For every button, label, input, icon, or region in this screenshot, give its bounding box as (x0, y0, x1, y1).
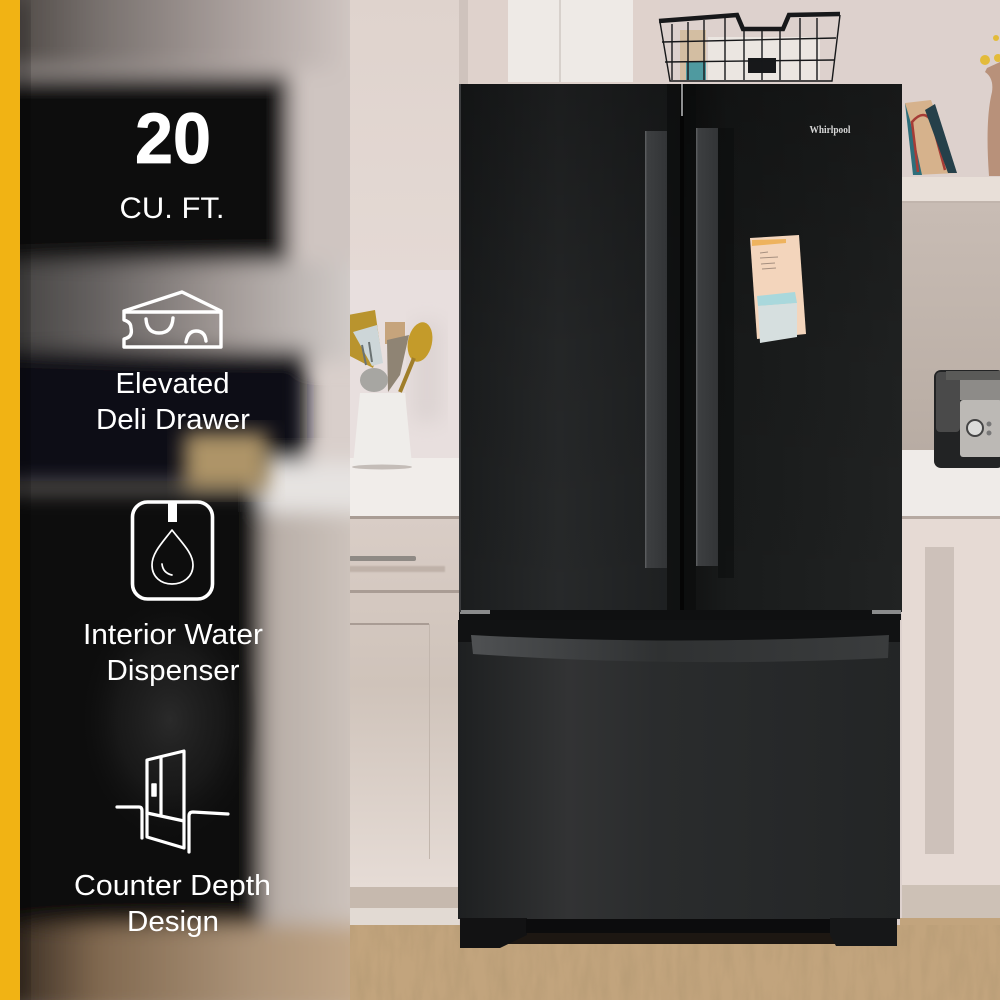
feature: elevated deli drawer (96, 292, 251, 436)
capacity unit: CU. FT. (120, 192, 224, 225)
right door (684, 84, 902, 612)
feature: capacity (120, 100, 224, 225)
label (74, 870, 271, 938)
paper towel roll (508, 0, 633, 82)
upper cabinet (349, 0, 460, 270)
counter right (902, 450, 1000, 516)
accent bar (0, 0, 20, 1000)
capacity number: 20 (135, 100, 211, 179)
feature: interior water dispenser (83, 502, 264, 687)
left door handle (645, 131, 667, 568)
label (83, 619, 264, 687)
door gap (667, 84, 696, 612)
feet (460, 918, 527, 948)
shelf (902, 177, 1000, 203)
label (96, 368, 251, 436)
magnet note (750, 235, 806, 343)
right door handle (696, 128, 718, 566)
wall right of fridge (902, 203, 1000, 453)
background kitchen scene (350, 0, 1000, 1000)
soft highlight on oven (110, 639, 229, 800)
fruit vase and decor (905, 35, 1000, 176)
floor (349, 925, 1000, 1000)
icon: water dispenser (132, 502, 212, 599)
floor shadow (490, 930, 860, 944)
counter left (349, 458, 460, 518)
wire basket (659, 14, 840, 81)
handle shadow (718, 128, 734, 578)
lower cabinet right (902, 519, 1000, 885)
icon: fridge in counter (117, 751, 228, 852)
utensil crock (348, 310, 436, 470)
lower cabinet left (349, 519, 459, 888)
dark left edge (20, 0, 31, 998)
toaster (934, 370, 1000, 468)
feature: counter depth design (74, 751, 271, 938)
label: Design (127, 906, 219, 938)
label: Dispenser (106, 655, 240, 687)
drawer handle (471, 635, 889, 662)
brand logo: Whirlpool (810, 124, 850, 136)
blurred background panel (20, 0, 350, 1000)
label: Deli Drawer (96, 404, 251, 436)
shelf strip (459, 610, 901, 620)
wall behind utensils (349, 270, 460, 460)
freezer drawer (458, 620, 900, 919)
label: Interior Water (83, 619, 264, 651)
blurred gold object (184, 432, 268, 490)
refrigerator (458, 84, 902, 948)
label: Elevated (116, 368, 230, 400)
label: Counter Depth (74, 870, 271, 902)
icon: cheese wedge (124, 292, 221, 347)
left door (461, 84, 680, 612)
